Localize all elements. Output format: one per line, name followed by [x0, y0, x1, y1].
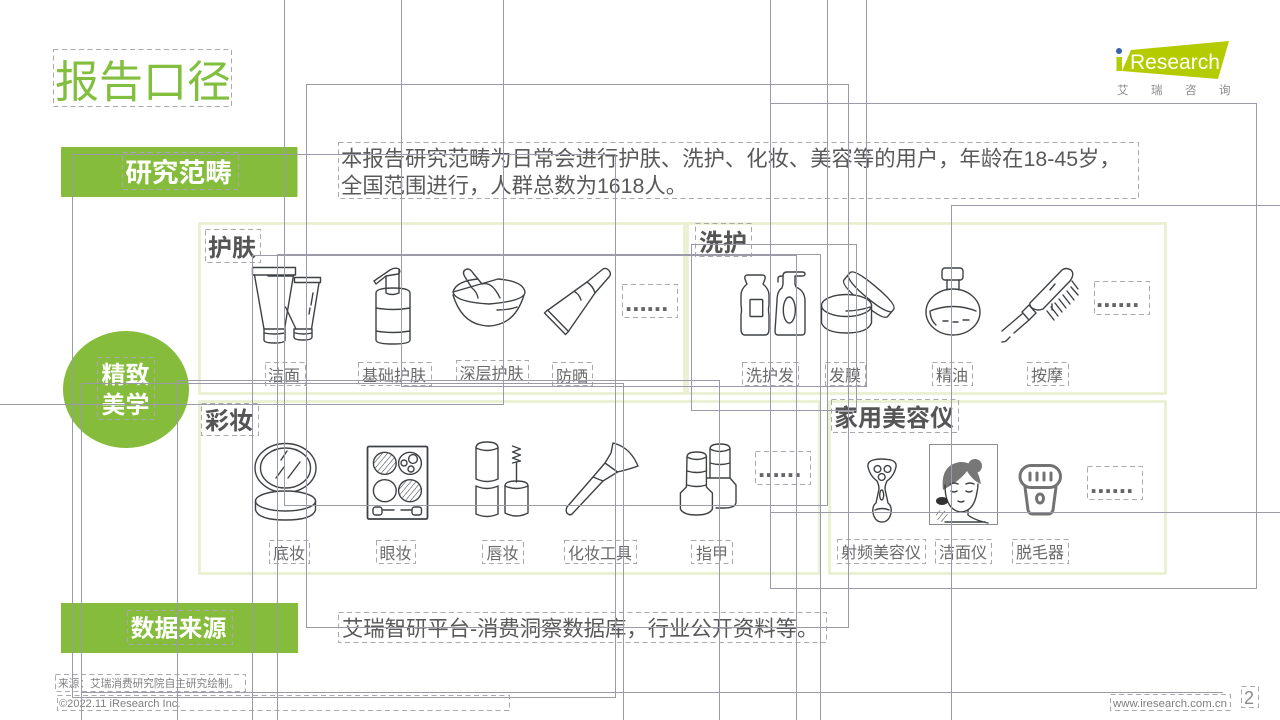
heading bar: 研究范畴 [61, 147, 298, 197]
copyright: ©2022.11 iResearch Inc. [59, 698, 180, 710]
circle badge: 精致美学: 精致 [102, 362, 150, 389]
label: 洗护发 [742, 362, 798, 386]
text block: research scope [338, 142, 1138, 198]
label: 深层护肤 [456, 360, 528, 384]
copyright [58, 696, 510, 710]
label: 射频美容仪 [838, 540, 926, 564]
label: 化妆工具: 化妆工具 [568, 545, 632, 563]
heading bar: 数据来源 [61, 603, 298, 653]
ellipsis: more devices: ...... [1090, 469, 1133, 499]
panel: 彩妆 [200, 402, 820, 574]
ellipsis: more makeup: ...... [758, 453, 801, 483]
label: 底妆: 底妆 [273, 545, 305, 563]
icon: eyeshadow palette [368, 446, 428, 519]
ellipsis: more haircare: ...... [1096, 283, 1139, 313]
icon: foundation compact [255, 444, 316, 520]
label: 脱毛器 [1012, 540, 1068, 564]
ellipsis: more skincare: ...... [625, 287, 668, 317]
label: 深层护肤: 深层护肤 [459, 365, 524, 383]
icon: sunscreen tube [544, 268, 610, 334]
source note [56, 674, 246, 692]
icon: mortar bowl [453, 269, 525, 326]
label: 精油: 精油 [936, 367, 968, 385]
title: 报告口径 [55, 58, 231, 107]
heading: 洗护: 洗护 [699, 230, 747, 257]
panel: 洗护 [688, 224, 1166, 394]
heading: 彩妆: 彩妆 [205, 408, 253, 435]
label: 按摩: 按摩 [1031, 367, 1063, 385]
heading bar: 研究范畴: 研究范畴 [125, 158, 232, 188]
label: 唇妆 [482, 540, 524, 564]
label: 化妆工具 [564, 540, 636, 564]
label: 防晒 [552, 362, 592, 386]
logo: iResearch: 咨 [1185, 83, 1196, 97]
logo: iResearch: 瑞 [1151, 83, 1162, 97]
label: 防晒: 防晒 [556, 368, 588, 386]
text block: research scope: 本报告研究范畴为日常会进行护肤、洗护、化妆、美容等的用户，年龄在18-45岁， [341, 147, 1121, 171]
icon: lipstick and mascara [476, 442, 528, 516]
heading: 洗护 [696, 224, 752, 257]
label: 唇妆: 唇妆 [486, 545, 519, 563]
label: 洁面: 洁面 [268, 367, 300, 385]
logo: iResearch [1116, 41, 1230, 97]
label: 发膜: 发膜 [829, 367, 861, 385]
panel: 护肤 [200, 224, 684, 394]
heading: 护肤: 护肤 [208, 235, 256, 262]
logo: iResearch: Research [1130, 51, 1220, 74]
icon: hair mask jar [822, 268, 897, 333]
logo: iResearch: 询 [1219, 84, 1230, 97]
label: 指甲 [692, 540, 732, 564]
label: 眼妆 [376, 540, 416, 564]
label: 脱毛器: 脱毛器 [1016, 544, 1064, 562]
text block: data source: 艾瑞智研平台-消费洞察数据库，行业公开资料等。 [342, 617, 818, 641]
icon: woman using facial cleanser [930, 444, 998, 524]
label: 精油 [932, 362, 972, 386]
source note: 来源：艾瑞消费研究院自主研究绘制。 [58, 677, 239, 690]
label: 洗护发: 洗护发 [746, 367, 794, 385]
page number [1242, 686, 1258, 708]
label: 基础护肤: 基础护肤 [362, 367, 426, 385]
panel: 家用美容仪 [830, 400, 1166, 574]
heading bar: 数据来源: 数据来源 [130, 616, 226, 642]
logo: iResearch: 艾 [1117, 84, 1128, 97]
icon: epilator [1020, 466, 1060, 514]
icon: nail polish [680, 444, 736, 515]
label: 指甲: 指甲 [696, 545, 728, 563]
icon: makeup brush [566, 443, 638, 515]
label: 发膜 [826, 362, 866, 386]
label: 射频美容仪: 射频美容仪 [841, 544, 921, 562]
icon: pump bottle [374, 268, 410, 344]
label: 基础护肤 [358, 362, 432, 386]
circle badge: 精致美学: 美学 [102, 392, 150, 419]
circle badge: 精致美学 [63, 331, 189, 448]
icon: massage brush [1002, 268, 1078, 342]
icon: RF beauty device [868, 459, 896, 522]
label: 洁面仪 [936, 540, 992, 564]
icon: cleanser tubes [252, 268, 320, 343]
label: 洁面仪: 洁面仪 [939, 544, 987, 562]
website: www.iresearch.com.cn [1112, 698, 1227, 710]
label: 底妆 [270, 540, 310, 564]
heading: 家用美容仪: 家用美容仪 [834, 405, 954, 432]
label: 洁面 [266, 362, 306, 386]
text block: research scope: 全国范围进行，人群总数为1618人。 [341, 174, 687, 198]
icon: shampoo bottles [741, 272, 805, 335]
label: 按摩 [1028, 362, 1068, 386]
icon: essential oil flask [926, 268, 980, 335]
page number: 2 [1244, 688, 1254, 708]
label: 眼妆: 眼妆 [379, 545, 412, 563]
